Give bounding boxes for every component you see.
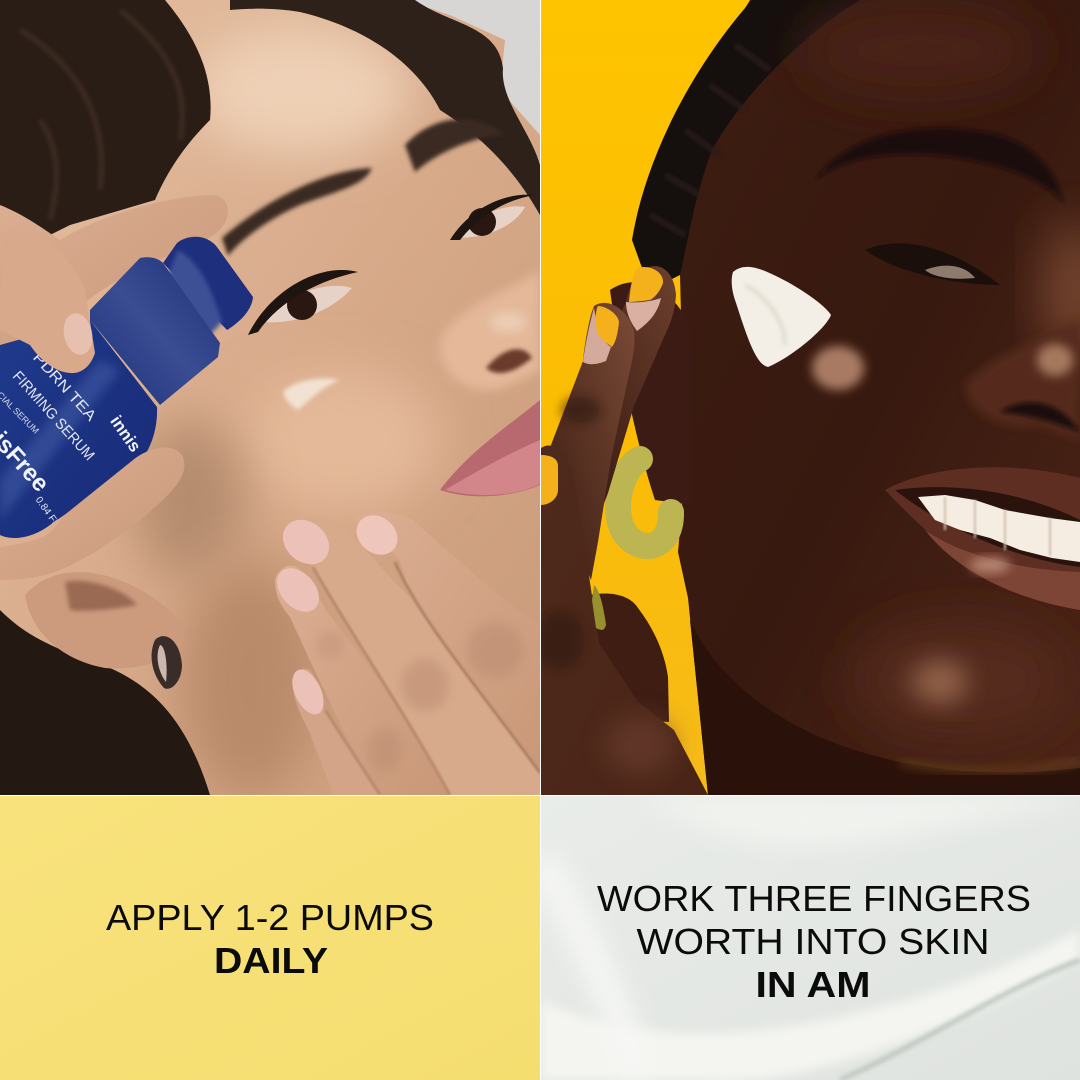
thumb and palm <box>541 445 708 795</box>
forehead glow <box>800 5 1040 95</box>
ear <box>25 572 185 668</box>
eyebrows <box>222 168 372 256</box>
eye left <box>262 286 352 322</box>
finger: little <box>292 669 380 795</box>
eye <box>865 243 1000 285</box>
ring <box>592 585 606 630</box>
serum dab on cheek <box>283 378 340 410</box>
lips <box>440 400 540 496</box>
hair <box>0 0 540 795</box>
background corner <box>405 0 540 135</box>
heading: work three fingers in AM: WORTH INTO SKIN <box>636 921 990 962</box>
heading: apply pumps daily <box>106 897 434 981</box>
raised hand <box>536 266 708 795</box>
heading: work three fingers in AM: IN AM <box>756 964 870 1005</box>
ear <box>610 282 692 505</box>
mouth <box>885 467 1080 610</box>
brow <box>815 128 1065 205</box>
back finger <box>585 593 669 722</box>
hand on chin <box>269 507 540 795</box>
finger B <box>551 303 635 580</box>
bottle body <box>0 320 157 538</box>
cream on cheek <box>732 267 831 367</box>
bottle label: FIRMING SERUM <box>9 368 98 464</box>
finger gripping bottle <box>19 300 95 374</box>
cheek highlight <box>812 346 864 390</box>
nose <box>440 270 540 390</box>
nail skin <box>626 298 661 331</box>
thumb under bottle <box>0 447 184 580</box>
center divider <box>540 0 541 1080</box>
braided hair <box>632 0 860 290</box>
knuckle creases <box>561 396 601 424</box>
heading: apply pumps daily: APPLY 1-2 PUMPS <box>106 897 434 938</box>
finger: second <box>311 548 540 795</box>
yellow nails <box>629 267 663 302</box>
product: blue serum bottle <box>0 237 253 538</box>
heading: apply pumps daily: DAILY <box>214 940 328 981</box>
bottle label <box>0 349 145 526</box>
panel: left photo, woman applying serum <box>0 0 540 800</box>
finger: third <box>275 566 352 716</box>
finger A <box>570 266 676 538</box>
nails <box>283 520 329 564</box>
earring <box>152 636 182 689</box>
finger behind bottle <box>0 195 228 345</box>
eye right <box>456 206 525 238</box>
heading: work three fingers in AM: WORK THREE FINGERS <box>597 878 1031 919</box>
jaw rim light <box>900 760 1080 772</box>
face <box>678 0 1080 795</box>
forehead highlight <box>190 25 410 155</box>
panel: yellow caption, left <box>0 796 540 1080</box>
cheek shading <box>240 370 440 510</box>
heading: work three fingers in AM <box>597 878 1031 1005</box>
panel: cream texture caption, right <box>541 796 1080 1080</box>
panel: right photo, woman with cream on cheek <box>536 0 1080 795</box>
nose <box>965 320 1080 440</box>
earring <box>618 459 671 546</box>
finger joints <box>470 625 519 674</box>
bottle label: innis <box>106 412 145 456</box>
bottle label: PDRN TEA <box>29 349 99 425</box>
neck <box>690 620 1080 795</box>
collar <box>90 257 220 405</box>
finger: top <box>392 519 446 592</box>
bottle label: 0.84 Fl <box>33 495 59 526</box>
pump <box>163 237 253 330</box>
